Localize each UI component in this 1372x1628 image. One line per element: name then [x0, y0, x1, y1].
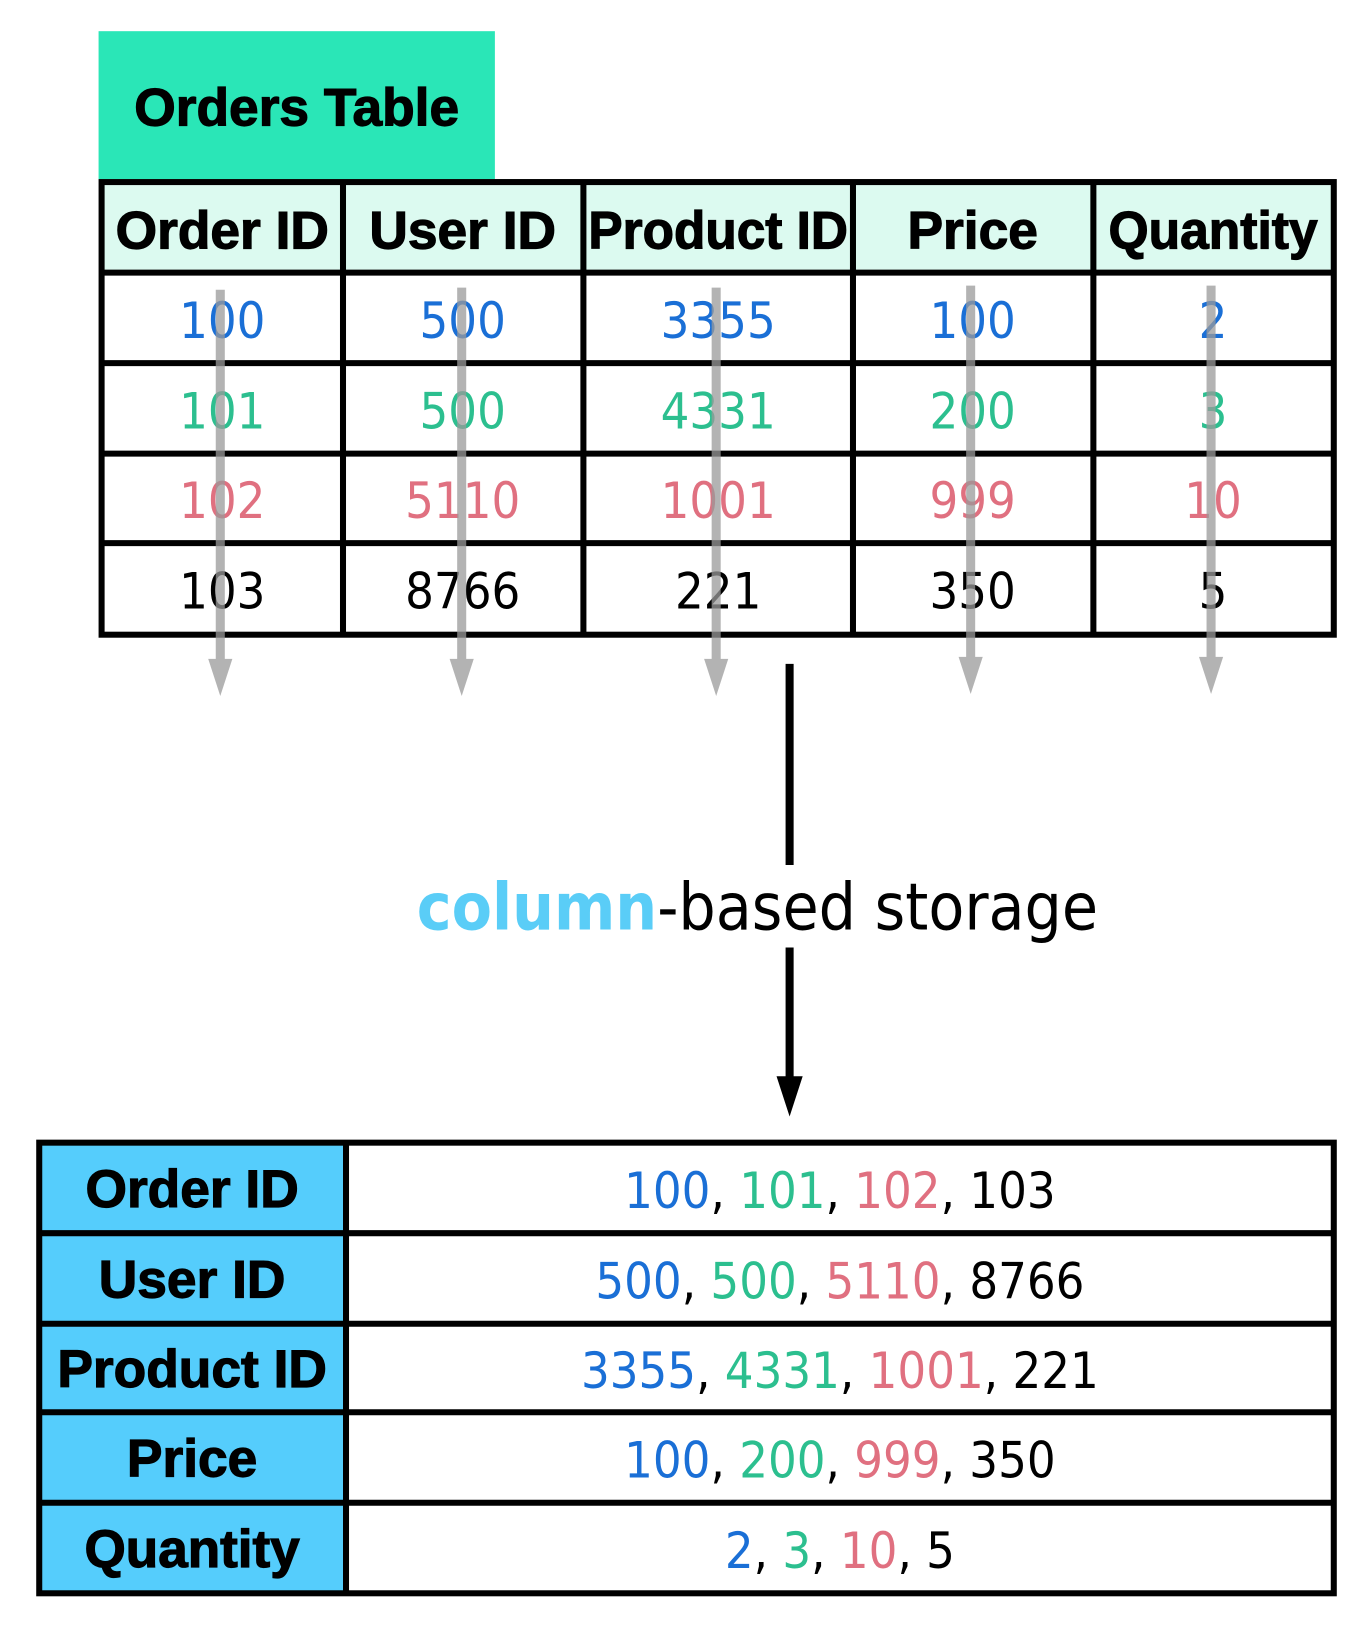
- data rows: 8766: [405, 562, 520, 621]
- orders table: [102, 182, 1334, 635]
- title: [99, 31, 495, 179]
- row labels: User ID: [99, 1251, 285, 1310]
- data rows: 103: [179, 562, 265, 621]
- data rows: 4331: [661, 381, 776, 440]
- header row: Price: [907, 201, 1038, 260]
- header row: Quantity: [1108, 201, 1318, 260]
- header row: [116, 201, 1318, 260]
- data rows: 100: [930, 291, 1016, 350]
- data rows: 500: [420, 381, 506, 440]
- row values: 2, 3, 10, 5: [725, 1521, 955, 1580]
- row values: 500, 500, 5110, 8766: [595, 1252, 1084, 1311]
- data rows: 5110: [405, 471, 520, 530]
- header row: Order ID: [116, 201, 329, 260]
- column storage table: [39, 1143, 1334, 1593]
- title: Orders Table: [134, 79, 459, 138]
- data rows: 999: [930, 471, 1016, 530]
- data rows: 1001: [661, 471, 776, 530]
- row labels: [57, 1160, 327, 1579]
- row labels: Order ID: [85, 1160, 299, 1219]
- header row: Product ID: [588, 201, 848, 260]
- data rows: 10: [1184, 471, 1242, 530]
- data rows: 5: [1199, 562, 1227, 621]
- header row: User ID: [369, 201, 556, 260]
- data rows: 500: [420, 291, 506, 350]
- data rows: 101: [179, 381, 265, 440]
- label: column-based storage: column-based storage: [417, 869, 1098, 945]
- row values: 100, 101, 102, 103: [624, 1161, 1056, 1220]
- data rows: [179, 291, 1242, 621]
- data rows: 221: [675, 562, 761, 621]
- data rows: 3: [1199, 381, 1227, 440]
- row values: 100, 200, 999, 350: [624, 1431, 1056, 1490]
- row labels: Product ID: [57, 1340, 327, 1399]
- row labels: Quantity: [84, 1520, 300, 1579]
- data rows: 200: [930, 381, 1016, 440]
- row values: 3355, 4331, 1001, 221: [581, 1341, 1099, 1400]
- data rows: 350: [930, 562, 1016, 621]
- row labels: Price: [127, 1430, 257, 1489]
- data rows: 100: [179, 291, 265, 350]
- arrow: main flow: [777, 664, 803, 1117]
- gray column arrows: [208, 286, 1223, 696]
- data rows: 2: [1199, 291, 1227, 350]
- row values: [581, 1161, 1099, 1580]
- data rows: 102: [179, 471, 265, 530]
- data rows: 3355: [661, 291, 776, 350]
